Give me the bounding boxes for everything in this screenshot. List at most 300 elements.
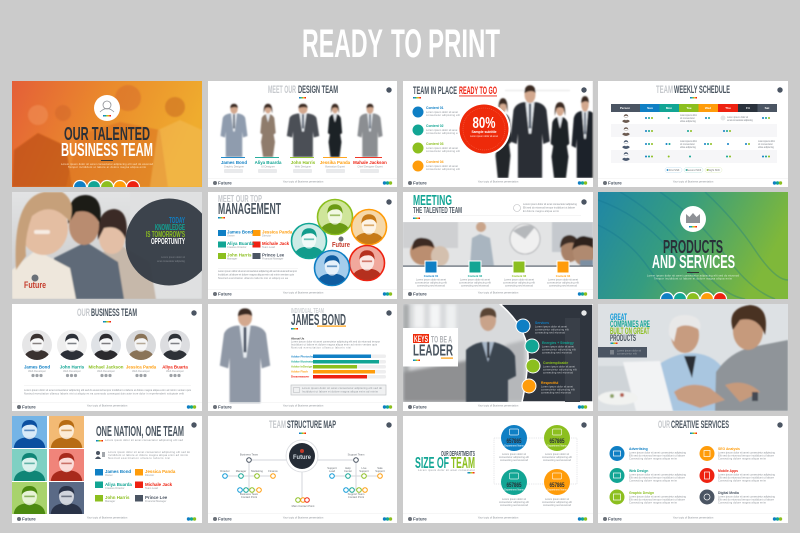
note box: Lorem ipsum dolor sit amet consectetur adipiscing elit sed do <box>302 386 383 390</box>
people list: James Bond <box>227 230 253 234</box>
title: TEAM IN PLACE <box>413 85 457 97</box>
skill bar chart: Adobe Flash <box>291 370 308 374</box>
people list: Michale Jack <box>145 482 173 487</box>
callout text: Lorem ipsum dolor sit <box>161 255 185 259</box>
department text: consectetur adipiscing elit <box>499 455 529 459</box>
service text: Elit sed do eiusmod tempor incididunt ut labore <box>629 498 686 502</box>
title: DESIGN TEAM <box>298 84 338 96</box>
footer: Your topic of Business presentation <box>283 180 324 184</box>
title: CREATIVE SERVICES <box>671 419 729 431</box>
service text: Lorem ipsum dolor sit amet consectetur adipiscing <box>629 472 687 476</box>
footer: Your topic of Business presentation <box>283 516 324 520</box>
title card: TO BE A <box>431 334 452 344</box>
footer: Future <box>22 404 36 410</box>
title: TEAM <box>656 84 673 96</box>
panel: team in place ready to go <box>403 81 605 187</box>
intro text: Et dolore magna aliqua enim <box>523 209 559 213</box>
footer: Your topic of Business presentation <box>478 180 519 184</box>
name columns: Graphic Designer <box>224 164 244 168</box>
people list: Prince Lee <box>145 495 168 500</box>
people list: Owner <box>105 473 113 477</box>
footer: Your topic of Business presentation <box>673 516 714 520</box>
badge <box>581 310 587 316</box>
panel: our business team <box>12 304 202 411</box>
node labels: Sale <box>377 466 383 470</box>
people list: Manager <box>105 499 115 503</box>
service text: Elit sed do eiusmod tempor incididunt ut labore <box>718 476 775 480</box>
service text: SEO Analysis <box>718 447 740 451</box>
badge <box>191 310 197 316</box>
node labels: Contact Point <box>348 495 364 499</box>
legend pills: First Shift <box>669 169 680 172</box>
main heading: TO <box>391 22 422 66</box>
footer <box>208 289 397 296</box>
content tiles: consecting sed eiusmod <box>505 284 534 288</box>
description: Lorem ipsum dolor sit amet consectetur adipiscing elit sed do eiusmod tempor incididunt ut labore et dolore magna aliqua enim ad minim veniam quis <box>24 388 192 392</box>
about text <box>291 336 380 350</box>
content tiles: consectetur adipiscing elit <box>415 280 447 284</box>
panel: great companies photo slide <box>598 304 788 411</box>
logo <box>332 236 350 249</box>
schedule table: Sun <box>647 106 653 110</box>
title: Lorem ipsum dolor sit amet consectetur adipiscing elit sed <box>105 438 184 442</box>
description: Tempor incididunt ut labore et dolore magna aliqua enim <box>68 165 146 169</box>
content list: consectetur adipiscing elit <box>426 113 460 117</box>
footer <box>17 516 196 522</box>
people list: Prince Lee <box>262 252 285 258</box>
content tiles: consectetur adipiscing elit <box>547 280 579 284</box>
department text: Lorem ipsum dolor sit <box>502 497 526 501</box>
dark caption box: Lorem ipsum dolor sit <box>617 348 641 352</box>
people list: Financial Manager <box>262 256 283 260</box>
description <box>61 160 154 169</box>
team photos <box>220 104 383 157</box>
slide title: PRODUCTS <box>663 236 723 257</box>
dashed frame <box>494 438 577 484</box>
footer: Future <box>413 292 427 296</box>
node labels <box>220 452 385 508</box>
photo overlay: team silhouettes <box>12 85 202 187</box>
node labels: Lead <box>329 469 335 473</box>
people list: Jessica Panda <box>262 230 293 234</box>
panel: team weekly schedule <box>598 81 788 187</box>
footer <box>403 513 593 522</box>
panel: our creative services <box>598 416 788 523</box>
node labels: Business Team <box>240 452 259 456</box>
description <box>647 272 740 280</box>
title card <box>403 328 458 366</box>
value list: consecting sed eiusmod <box>542 350 573 354</box>
callout text: amet consectetur adipiscing <box>157 259 186 263</box>
schedule table: elitse adipiscing <box>680 119 697 123</box>
description: Tempor incididunt ut labore et dolore magna aliqua enim <box>654 276 732 280</box>
names: James Bond <box>24 364 50 370</box>
skill bar chart: Adobe Illustrator <box>291 360 314 364</box>
content list: Lorem ipsum dolor sit amet <box>426 128 458 132</box>
badge <box>581 199 587 205</box>
callout: 80 percent <box>458 102 510 156</box>
title <box>269 419 336 434</box>
logo: Future <box>332 242 350 249</box>
footer: Future <box>608 180 622 186</box>
business photo <box>598 305 788 411</box>
slide title: GREAT <box>610 312 627 323</box>
badge <box>386 87 392 93</box>
service text: Elit sed do eiusmod tempor incididunt ut labore <box>718 454 775 458</box>
footer: Future <box>22 516 36 522</box>
nodes <box>223 458 382 502</box>
badge <box>581 87 587 93</box>
footer: Your topic of Business presentation <box>283 404 324 408</box>
description: Incididunt ut labore et dolore magna aliqua enim ad minim veniam quis <box>218 272 295 276</box>
footer <box>403 178 593 187</box>
value list: consectetur adipiscing elit <box>535 328 569 332</box>
slide title: BUILT ON GREAT <box>610 326 650 337</box>
department text: consectetur adipiscing elit <box>499 500 529 504</box>
service text: Lorem ipsum dolor sit amet consectetur adipiscing <box>629 494 687 498</box>
service text <box>629 447 776 504</box>
description: Lorem ipsum dolor sit amet consectetur adipiscing elit sed do eiusmod <box>647 274 740 278</box>
description <box>24 385 192 396</box>
content tiles: Lorem ipsum dolor sit amet <box>548 278 578 282</box>
names: Web Developer <box>166 369 184 373</box>
intro text: Elit sed do eiusmod tempor incididunt ut labore <box>523 206 576 210</box>
callout text: TODAY <box>169 216 185 225</box>
value list: consecting sed eiusmod <box>535 330 566 334</box>
value list <box>516 319 577 394</box>
service text: Consecting dolore magna aliqua enim <box>629 456 677 460</box>
logo: Future <box>24 280 46 290</box>
content tiles: Lorem ipsum dolor sit amet <box>416 278 446 282</box>
people list: Creative Director <box>227 245 247 249</box>
title: TEAM <box>451 455 475 472</box>
content tiles <box>415 261 579 288</box>
service text: Web Design <box>629 469 648 473</box>
content tiles: consectetur adipiscing elit <box>459 280 491 284</box>
content list: Lorem ipsum dolor sit amet <box>426 164 458 168</box>
about text: Lorem ipsum dolor sit amet consectetur adipiscing elit sed do eiusmod tempor <box>291 340 380 344</box>
schedule table: Tue <box>686 106 692 110</box>
panel: keys to be a leader <box>403 304 593 411</box>
department text: consecting sed eiusmod <box>500 458 529 462</box>
dark callout circle <box>126 198 202 286</box>
content tiles: consecting sed eiusmod <box>461 284 490 288</box>
department circles: 657865 <box>506 483 522 489</box>
content list: consectetur adipiscing elit <box>426 149 460 153</box>
callout: 80 percent: Sample subtitle <box>471 130 497 134</box>
node labels: Help <box>345 466 351 470</box>
service text: Graphic Design <box>629 491 654 495</box>
value list: Lorem ipsum dolor sit amet <box>542 344 574 348</box>
panel: products and services <box>598 192 788 306</box>
department text: Lorem ipsum dolor sit <box>545 452 569 456</box>
icon: team badge <box>94 95 120 121</box>
footer <box>598 513 788 522</box>
department text: consecting sed eiusmod <box>543 458 572 462</box>
panel: team structure map <box>208 416 397 523</box>
badge <box>386 422 392 428</box>
footer: Future <box>218 404 232 410</box>
department text: consectetur adipiscing elit <box>542 455 572 459</box>
skill bar chart: Dreamweaver <box>291 374 310 378</box>
dark caption box: consectetur elit <box>617 352 637 356</box>
department circles: Department Name <box>547 444 567 448</box>
node labels: Marketing <box>251 469 263 473</box>
names <box>24 364 188 373</box>
name columns: John Harris <box>291 160 316 165</box>
value list: Energies + Strategy <box>542 341 574 345</box>
content list: Lorem ipsum dolor sit amet <box>426 146 458 150</box>
department circles: Department Name <box>504 488 524 492</box>
footer: Your topic of Business presentation <box>478 404 519 408</box>
title: TEAM <box>269 419 286 431</box>
title: INDIVIDUAL TEAM <box>291 308 324 315</box>
value list: consectetur adipiscing elit <box>541 388 575 392</box>
service text: Elit sed do eiusmod tempor incididunt ut labore <box>629 454 686 458</box>
description: Nostrud exercitation ullamco laboris nisi ut aliquip ex ea commodo consequat duis aute irure dolor in reprehenderit voluptate velit <box>24 392 184 396</box>
callout text: IS TOMORROW'S <box>146 230 185 239</box>
callout text: OPPORTUNITY <box>151 237 185 246</box>
content list: consectetur adipiscing elit <box>426 167 460 171</box>
schedule table: Wed <box>705 106 711 110</box>
intro text <box>514 202 578 213</box>
node labels: Support <box>359 469 369 473</box>
intro text <box>95 450 191 460</box>
schedule table: Lorem ipsum dolor sit <box>727 115 748 119</box>
dark caption box <box>598 347 647 358</box>
legend pills: Second Shift <box>687 169 701 172</box>
photo grid <box>12 416 84 514</box>
names: Web Developer <box>63 369 81 373</box>
name columns: Chief Designer Expert <box>357 164 383 168</box>
footer <box>403 289 593 296</box>
team photo <box>12 192 202 299</box>
slide title <box>652 240 735 268</box>
node labels: Live <box>362 466 367 470</box>
title <box>77 307 137 322</box>
badge <box>581 422 587 428</box>
slide title: AND SERVICES <box>652 251 735 272</box>
footer: Your topic of Business presentation <box>87 404 128 408</box>
names: Web Developer <box>132 369 150 373</box>
people list: Jessica Panda <box>145 469 176 474</box>
colour circles <box>72 180 140 187</box>
service text: Lorem ipsum dolor sit amet consectetur adipiscing <box>718 494 776 498</box>
profile photo <box>220 308 270 403</box>
people list <box>218 230 293 260</box>
footer <box>208 402 397 410</box>
name columns: Mahale Jackson <box>353 160 387 165</box>
value list: Respectful <box>541 381 558 385</box>
panel: size of team <box>403 416 593 523</box>
schedule table: Thu <box>725 106 731 110</box>
department text: consecting sed eiusmod <box>543 503 572 507</box>
callout: 80 percent: Lorem ipsum dolor sit amet <box>470 134 498 138</box>
legend pills <box>665 168 722 172</box>
department text: consectetur adipiscing elit <box>542 500 572 504</box>
schedule table: Fri <box>746 106 750 110</box>
node labels: Support Team <box>348 492 365 496</box>
schedule table: Sat <box>765 106 769 110</box>
slide title <box>610 312 650 344</box>
name columns: Web Designer <box>295 164 311 168</box>
divider bar <box>403 266 593 267</box>
schedule table: elitse adipiscing <box>680 145 697 149</box>
intro text: Lorem ipsum dolor sit amet consectetur adipiscing <box>523 202 578 206</box>
title card: KEYS <box>414 334 428 344</box>
title <box>218 194 281 218</box>
content list: Content 04 <box>426 160 444 164</box>
team portrait circles <box>292 200 386 286</box>
portraits <box>22 330 190 360</box>
names: Michael Jackson <box>89 364 124 370</box>
badge <box>777 422 783 428</box>
title <box>658 419 729 434</box>
names: Web Developer <box>28 369 46 373</box>
title: OUR <box>77 307 90 319</box>
value list: Services <box>535 321 549 325</box>
service text: Consecting dolore magna aliqua enim <box>629 500 677 504</box>
panel: one nation, one team: ONE NATION, ONE TEAM <box>96 423 184 440</box>
content tiles: Lorem ipsum dolor sit amet <box>504 278 534 282</box>
slide title <box>61 123 153 160</box>
title: THE TALENTED TEAM <box>413 205 462 215</box>
department circles: Department Name <box>547 488 567 492</box>
value list: Contemplicable <box>543 361 568 365</box>
value list: consectetur adipiscing elit <box>542 348 576 352</box>
photo and dark panel <box>403 304 593 402</box>
slide title: BUSINESS TEAM <box>61 139 153 160</box>
schedule table: amet consectetur adipiscing <box>727 118 754 122</box>
panel: one nation, one team <box>12 416 202 523</box>
content list: consectetur adipiscing elit <box>426 131 460 135</box>
wave texture <box>598 192 788 299</box>
service text: Lorem ipsum dolor sit amet consectetur adipiscing <box>629 450 687 454</box>
department text <box>499 452 572 507</box>
title: MEETING <box>413 192 452 209</box>
footer: Your topic of Business presentation <box>673 180 714 184</box>
department text: Lorem ipsum dolor sit <box>545 497 569 501</box>
skill bar chart <box>291 354 386 378</box>
node labels: Director <box>220 469 230 473</box>
content tiles: Content 02 <box>468 274 483 278</box>
people list: Manager <box>227 256 237 260</box>
title: SIZE OF <box>415 455 449 472</box>
people list: Owner <box>227 234 235 238</box>
node labels: Finance <box>268 469 278 473</box>
title: BUSINESS TEAM <box>91 307 137 319</box>
people list: Creative Director <box>105 486 125 490</box>
central hub: Future <box>293 454 311 461</box>
central hub <box>286 440 318 472</box>
about text: About Us <box>291 336 305 340</box>
footer: Future <box>218 292 232 296</box>
footer: Future <box>413 404 427 410</box>
value list: consecting sed eiusmod <box>541 390 572 394</box>
title <box>656 84 730 98</box>
node labels: Support <box>375 469 385 473</box>
description <box>218 268 298 280</box>
panel: team in place ready to go: READY TO GO <box>459 85 497 97</box>
footer: Future <box>608 516 622 522</box>
badge <box>191 422 197 428</box>
callout: 80 percent: 80% <box>472 115 496 132</box>
footer <box>208 513 397 522</box>
title <box>291 308 346 330</box>
people list: Team Lead <box>145 486 158 490</box>
people list: Director <box>145 473 154 477</box>
name columns: UI Designer <box>261 164 275 168</box>
title: MEET OUR <box>268 84 296 96</box>
service text: Elit sed do eiusmod tempor incididunt ut labore <box>629 476 686 480</box>
schedule table: Lorem ipsum dolor <box>680 113 697 117</box>
schedule table: sit consectetur <box>680 116 695 120</box>
content list: Content 01 <box>426 106 444 110</box>
people list: Michale Jack <box>262 241 290 246</box>
content tiles: Lorem ipsum dolor sit amet <box>460 278 490 282</box>
title: WEEKLY SCHEDULE <box>674 84 730 96</box>
service text: Consecting dolore magna aliqua enim <box>718 500 766 504</box>
panel: size of team: OUR DEPARTMENTS <box>441 451 475 458</box>
name columns: Illustration Expert <box>325 164 345 168</box>
description: Lorem ipsum dolor sit amet consectetur adipiscing elit sed do eiusmod <box>61 162 154 166</box>
people list <box>95 469 176 503</box>
description: Nostrud exercitation ullamco laboris nisi ut aliquip ex ea <box>218 276 289 280</box>
department text: consecting sed eiusmod <box>500 503 529 507</box>
people list: Team Lead <box>262 245 275 249</box>
badge <box>386 199 392 205</box>
title <box>268 84 338 98</box>
main heading: READY <box>302 22 383 66</box>
skill bar chart: Adobe Photoshop <box>291 354 315 358</box>
schedule table: sit consectetur <box>680 142 695 146</box>
service text: Advertising <box>629 447 648 451</box>
logo <box>24 274 46 288</box>
callout text <box>146 216 186 263</box>
about text: Incididunt ut labore et dolore magna aliqua enim ad minim veniam quis <box>291 342 378 346</box>
footer: Future <box>218 516 232 522</box>
service text: Lorem ipsum dolor sit amet consectetur adipiscing <box>718 472 776 476</box>
name columns: Jessika Panda <box>320 160 351 165</box>
names: Web Developer <box>97 369 115 373</box>
footer: Your topic of Business presentation <box>478 290 519 294</box>
panel: meeting the talented team <box>403 192 595 299</box>
title: Lorem ipsum dolor sit amet consectetur <box>418 468 475 472</box>
footer <box>208 178 397 186</box>
service text: Consecting dolore magna aliqua enim <box>629 478 677 482</box>
slide title: OUR TALENTED <box>64 123 150 144</box>
footer <box>408 404 587 410</box>
department circles: 657865 <box>550 439 565 445</box>
slide title: PRODUCTS <box>610 333 636 344</box>
node labels: Contact Point <box>241 495 257 499</box>
content list: Content 02 <box>426 124 444 128</box>
description: Lorem ipsum dolor sit amet consectetur adipiscing elit sed do eiusmod tempor <box>218 269 297 273</box>
about text: Nostrud exercitation ullamco laboris nisi <box>291 346 351 350</box>
panel: james bond profile <box>208 304 397 411</box>
team photo <box>495 81 605 187</box>
service text: Digital Media <box>718 491 739 495</box>
value list: Lorem ipsum dolor sit amet <box>541 384 573 388</box>
department circles: 657865 <box>506 439 522 445</box>
people list: Aliya Buarda <box>105 482 132 487</box>
name columns: Aliya Buarda <box>255 160 282 165</box>
footer: Your topic of Business presentation <box>478 516 519 520</box>
footer: Your topic of Business presentation <box>87 516 128 520</box>
content tiles: consecting sed eiusmod <box>549 284 578 288</box>
footer: Future <box>218 180 232 186</box>
panel: meet our design team <box>208 81 397 187</box>
